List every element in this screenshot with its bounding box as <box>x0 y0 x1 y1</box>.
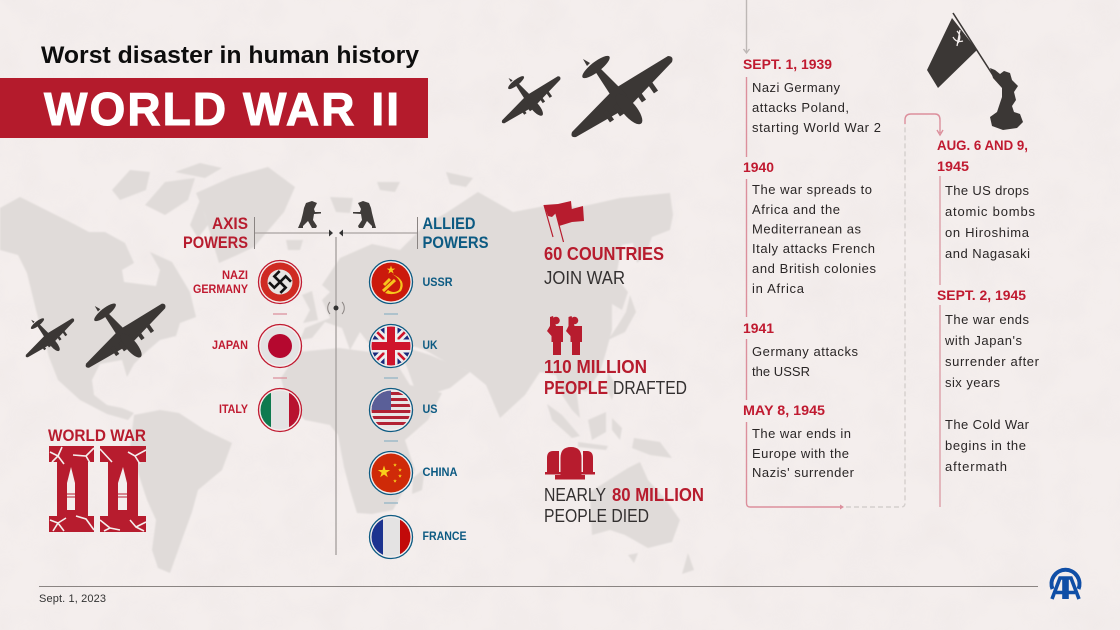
timeline: 1940 <box>743 159 876 296</box>
axis: Italy: ITALY <box>219 404 248 416</box>
icon: World War II logo: WORLD WAR <box>48 427 146 445</box>
timeline: Sept. 2, 1945: SEPT. 2, 1945 <box>937 287 1026 303</box>
timeline: May 8, 1945 <box>743 402 855 480</box>
axis: Nazi Germany <box>193 260 302 304</box>
stat: 60 countries: JOIN WAR <box>544 268 625 288</box>
timeline: Sept. 1, 1939: attacks Poland, <box>752 100 849 115</box>
world map <box>0 163 694 574</box>
axis heading: AXIS <box>212 214 248 233</box>
title banner: WORLD WAR II <box>44 83 399 135</box>
allied: USSR: USSR <box>422 277 453 289</box>
logo: AA <box>1052 570 1079 599</box>
stat: 80 million: 80 MILLION <box>612 484 704 505</box>
timeline: Sept. 2, 1945: The war ends <box>945 312 1030 327</box>
timeline: Sept. 2, 1945: aftermath <box>945 459 1007 474</box>
timeline: May 8, 1945: MAY 8, 1945 <box>743 402 825 418</box>
axis: Japan <box>212 324 302 368</box>
icon: soldier allied <box>353 201 376 228</box>
arrow: axis to centre <box>254 217 333 249</box>
allied: China <box>370 452 458 494</box>
timeline: 1940: and British colonies <box>752 261 876 276</box>
stat: 110 million: 110 MILLION <box>544 356 647 377</box>
timeline: Sept. 2, 1945: The Cold War <box>945 417 1030 432</box>
timeline: 1940: Mediterranean as <box>752 222 862 236</box>
allied: France <box>370 516 467 558</box>
timeline: 1940: The war spreads to <box>752 182 872 197</box>
allied: US: US <box>422 404 438 416</box>
timeline: Sept. 2, 1945: six years <box>945 375 1000 390</box>
icon: tombstones <box>545 447 595 480</box>
axis: Nazi Germany: NAZI <box>222 270 248 282</box>
axis: Japan: JAPAN <box>212 340 248 352</box>
icon: planes left <box>26 301 165 368</box>
icon: flag raising statue <box>927 13 1023 130</box>
timeline: Aug. 6 and 9, 1945: 1945 <box>937 158 969 174</box>
icon: flags <box>544 201 584 242</box>
timeline: May 8, 1945: Europe with the <box>752 446 849 461</box>
timeline connectors <box>744 0 943 510</box>
date: Sept. 1, 2023 <box>39 593 106 605</box>
allied: USSR <box>370 260 453 304</box>
timeline: Sept. 1, 1939: starting World War 2 <box>752 120 881 135</box>
allied: UK <box>370 324 438 368</box>
axis heading: POWERS <box>183 233 248 252</box>
allied: China: CHINA <box>422 467 458 479</box>
timeline: 1940: 1940 <box>743 159 774 175</box>
timeline: Sept. 2, 1945: with Japan's <box>944 333 1022 348</box>
allied: UK: UK <box>422 340 438 352</box>
timeline: 1940: Africa and the <box>752 202 840 217</box>
stat: 80 million <box>544 484 704 526</box>
timeline: Aug. 6 and 9, 1945: The US drops <box>945 183 1030 198</box>
allied heading: ALLIED <box>422 214 476 233</box>
timeline: Aug. 6 and 9, 1945: AUG. 6 AND 9, <box>937 137 1028 153</box>
stat: 80 million: PEOPLE DIED <box>544 506 649 526</box>
stat: 60 countries: 60 COUNTRIES <box>544 243 664 264</box>
timeline: Sept. 1, 1939: SEPT. 1, 1939 <box>743 56 832 72</box>
stat: 110 million <box>544 356 687 398</box>
stat: 110 million: PEOPLE <box>544 377 608 398</box>
timeline: Aug. 6 and 9, 1945 <box>937 137 1036 261</box>
timeline: Sept. 1, 1939: Nazi Germany <box>752 80 840 95</box>
axis: Italy <box>219 388 302 432</box>
timeline: Sept. 2, 1945: begins in the <box>945 438 1026 453</box>
central divider <box>328 237 344 555</box>
timeline: 1941: 1941 <box>743 320 774 336</box>
timeline: Sept. 1, 1939 <box>743 56 881 135</box>
timeline: 1940: in Africa <box>752 281 805 296</box>
allied: France: FRANCE <box>422 531 467 543</box>
timeline: Sept. 2, 1945 <box>937 287 1040 474</box>
timeline: 1941 <box>743 320 858 379</box>
timeline: Sept. 2, 1945: surrender after <box>945 354 1040 369</box>
timeline: Aug. 6 and 9, 1945: and Nagasaki <box>945 246 1030 261</box>
allied heading <box>422 214 488 252</box>
icon: soldiers <box>547 316 582 355</box>
stat: 60 countries <box>544 243 664 288</box>
timeline: 1941: the USSR <box>752 364 810 379</box>
icon: soldier axis <box>298 201 321 228</box>
timeline: 1940: Italy attacks French <box>752 241 875 256</box>
axis heading <box>183 214 248 252</box>
timeline: Aug. 6 and 9, 1945: on Hiroshima <box>945 225 1030 240</box>
axis: Nazi Germany: GERMANY <box>193 284 248 296</box>
allied heading: POWERS <box>422 233 488 252</box>
arrow: allied to centre <box>339 217 418 249</box>
timeline: May 8, 1945: Nazis' surrender <box>752 465 855 480</box>
stat: 80 million: NEARLY <box>544 485 606 505</box>
timeline: 1941: Germany attacks <box>752 344 858 359</box>
allied: US <box>370 388 438 432</box>
icon: planes top <box>502 53 672 137</box>
subtitle: Worst disaster in human history <box>41 42 419 69</box>
timeline: Aug. 6 and 9, 1945: atomic bombs <box>945 204 1036 219</box>
stat: 110 million: DRAFTED <box>613 378 687 398</box>
timeline: May 8, 1945: The war ends in <box>752 426 851 441</box>
icon: World War II logo <box>48 427 146 532</box>
